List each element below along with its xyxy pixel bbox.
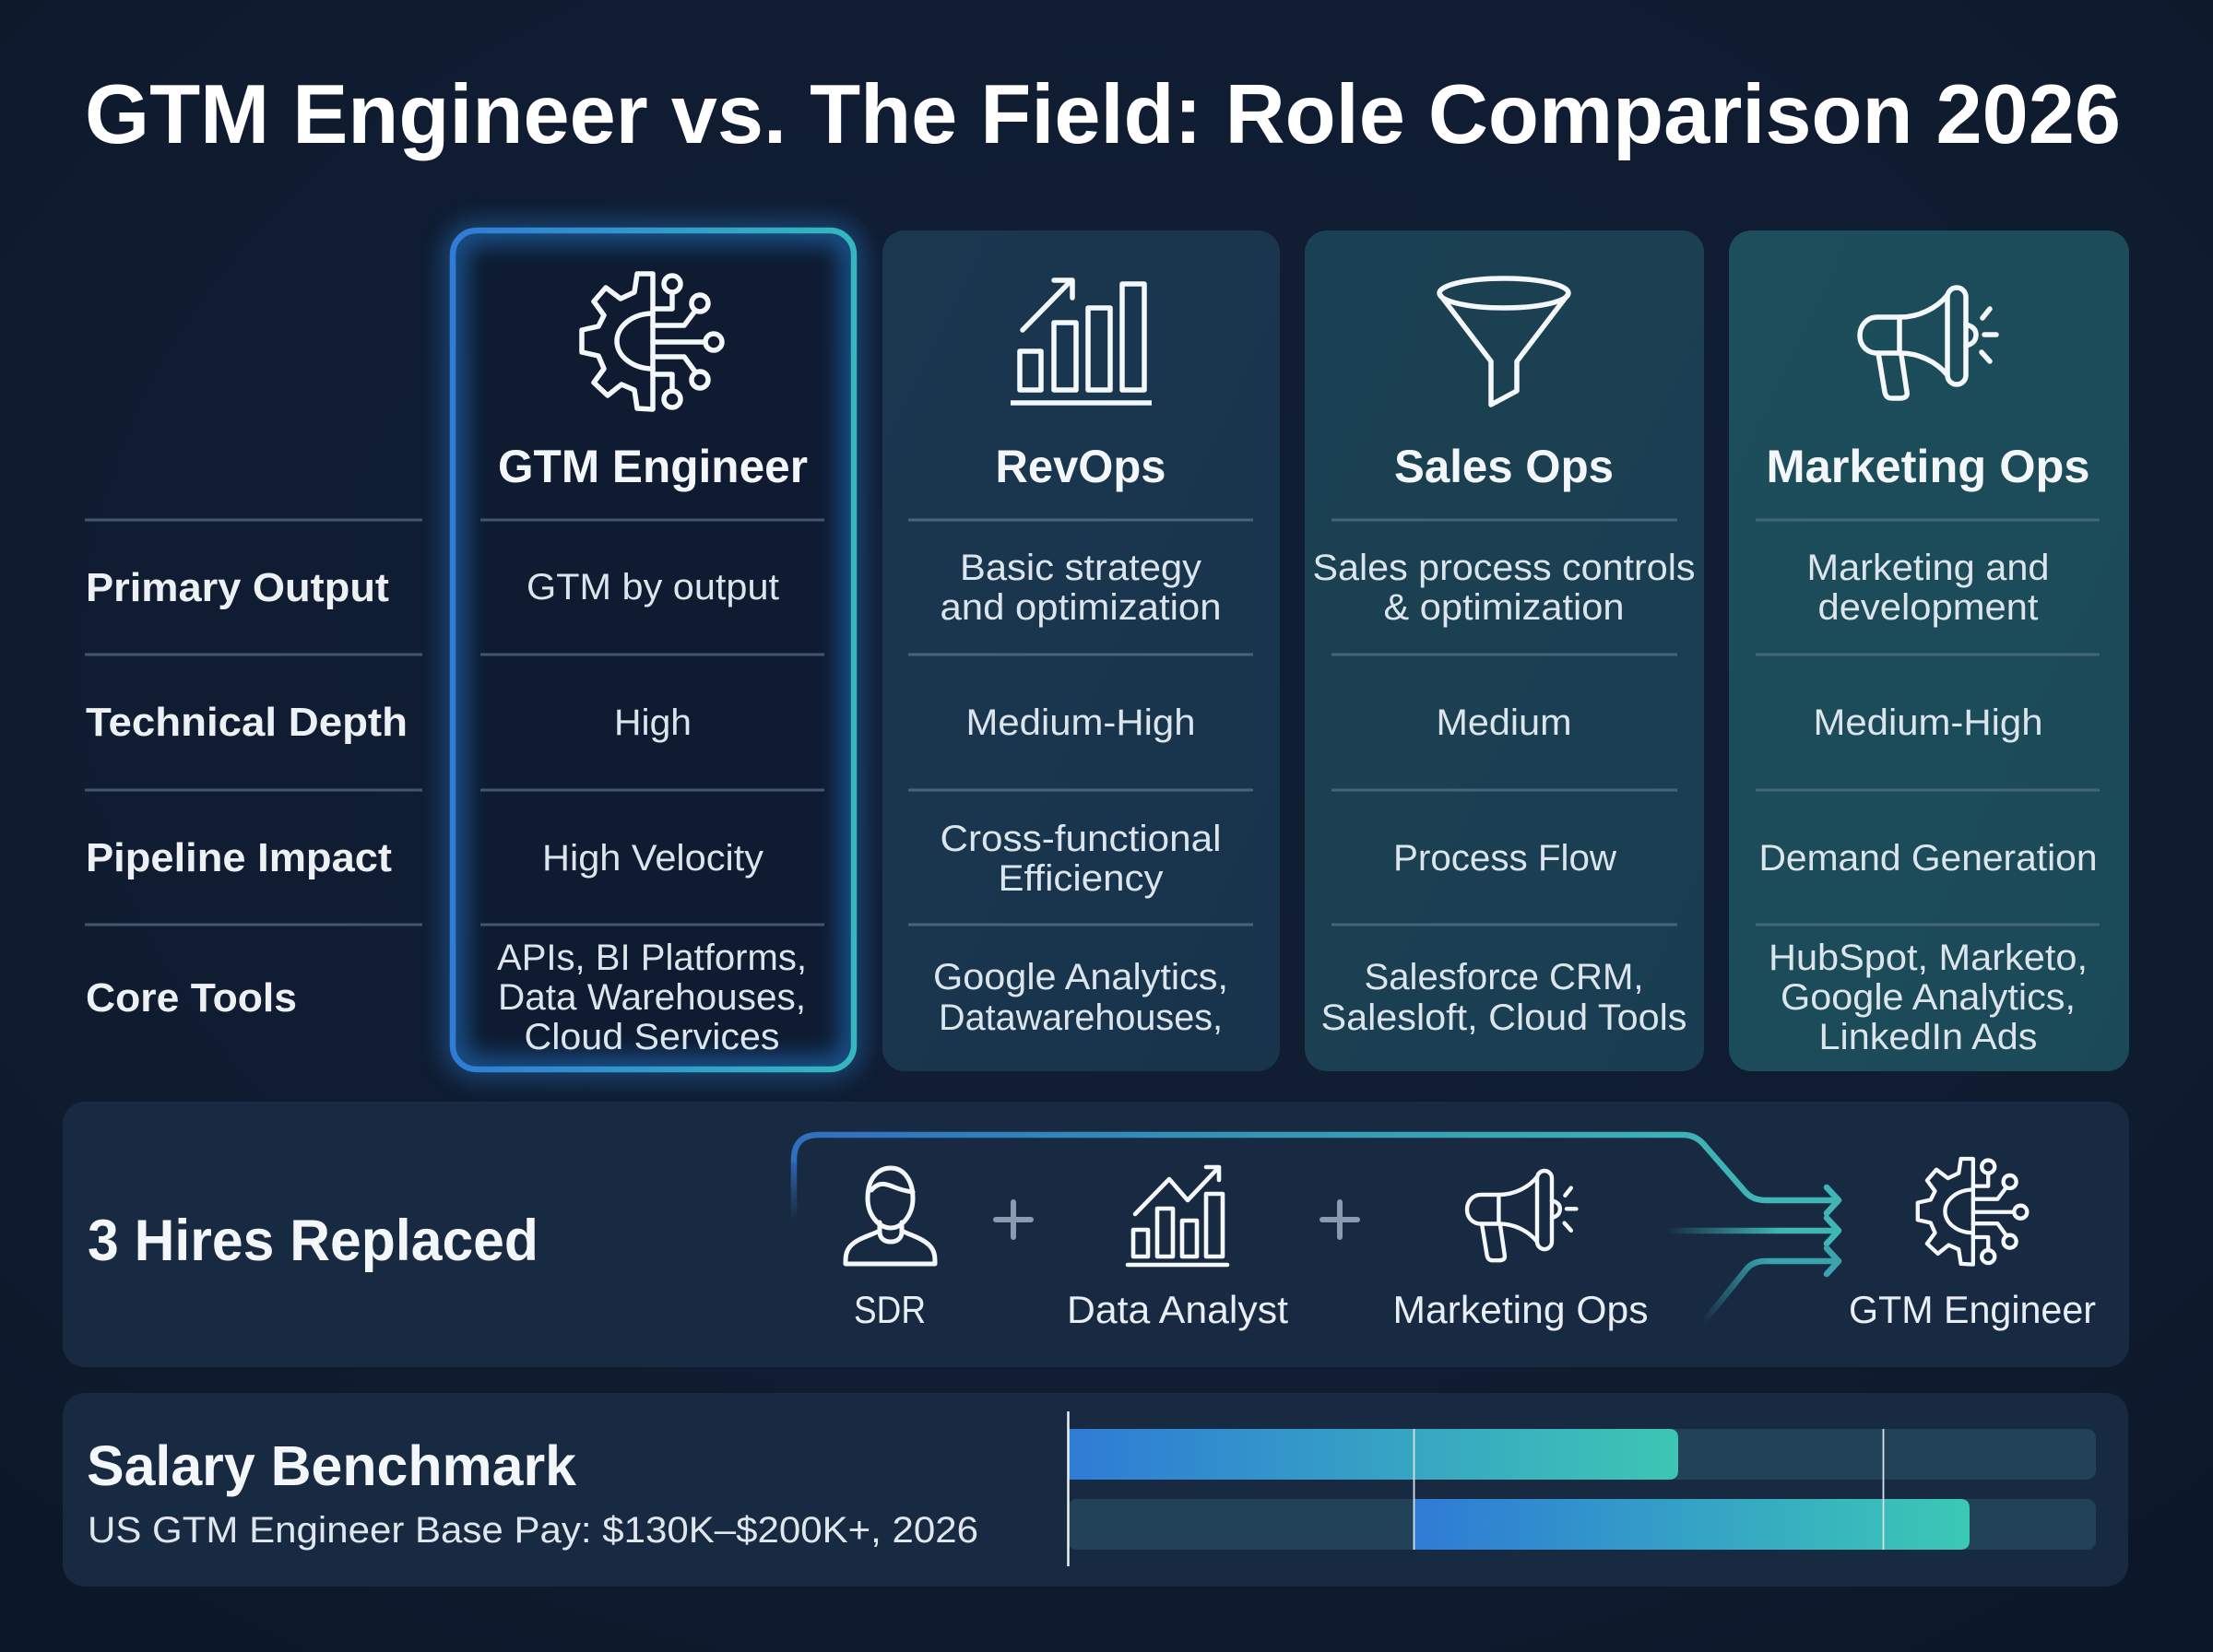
cell: core tools: Salesforce CRM, — [1365, 957, 1643, 997]
label: Technical Depth: Technical Depth — [86, 700, 408, 745]
icon: funnel — [1439, 278, 1568, 405]
cell: primary output — [1807, 548, 2049, 628]
panel: Salary Benchmark — [63, 1393, 2128, 1587]
cell: primary output — [1313, 548, 1695, 628]
panel: GTM Engineer column (highlighted) — [453, 230, 854, 1069]
cell: pipeline impact: High Velocity — [542, 838, 763, 879]
cell: primary output — [941, 548, 1221, 628]
label: Marketing Ops: Marketing Ops — [1392, 1288, 1649, 1331]
icon: gear with circuit — [582, 274, 722, 409]
panel: RevOps column — [882, 230, 1280, 1071]
label: Core Tools: Core Tools — [86, 975, 297, 1021]
icon: bar chart with arrow — [1011, 280, 1152, 403]
cell: core tools: HubSpot, Marketo, — [1769, 938, 2088, 978]
cell: pipeline impact: Efficiency — [998, 858, 1164, 899]
cell: core tools: Datawarehouses, — [939, 997, 1223, 1038]
operator: plus — [996, 1202, 1031, 1237]
cell: core tools: APIs, BI Platforms, — [497, 938, 807, 978]
panel: Marketing Ops column — [1729, 230, 2129, 1071]
cell: core tools: Data Warehouses, — [498, 977, 806, 1018]
cell: core tools: Google Analytics, — [933, 957, 1228, 997]
bar: bottom range — [1414, 1499, 1970, 1550]
label: GTM Engineer: GTM Engineer — [1849, 1288, 2096, 1331]
cell: primary output: GTM by output — [527, 567, 779, 608]
label: SDR: SDR — [854, 1288, 926, 1331]
cell: primary output: development — [1818, 587, 2038, 628]
icon: megaphone — [1467, 1171, 1576, 1260]
heading: Marketing Ops: Marketing Ops — [1767, 441, 2089, 492]
title: GTM Engineer vs. The Field: Role Comparison 2026 — [85, 68, 2121, 161]
cell: core tools: Google Analytics, — [1781, 977, 2076, 1018]
heading: 3 Hires Replaced: 3 Hires Replaced — [88, 1209, 538, 1273]
cell: core tools: Cloud Services — [524, 1017, 780, 1057]
arrow: bottom — [1703, 1248, 1839, 1323]
cell: primary output: & optimization — [1383, 587, 1625, 628]
label: Pipeline Impact: Pipeline Impact — [86, 835, 392, 880]
cell: primary output: Marketing and — [1807, 548, 2049, 588]
bar: top range — [1068, 1429, 1678, 1480]
operator: plus — [1322, 1202, 1357, 1237]
cell: primary output: Basic strategy — [960, 548, 1201, 588]
cell: pipeline impact: Process Flow — [1393, 838, 1616, 879]
panel: Sales Ops column — [1305, 230, 1704, 1071]
cell: primary output: and optimization — [941, 587, 1221, 628]
cell: pipeline impact: Cross-functional — [941, 819, 1221, 859]
cell: core tools: LinkedIn Ads — [1818, 1017, 2038, 1057]
cell: core tools — [1320, 957, 1687, 1038]
icon: data analyst chart — [1128, 1167, 1227, 1265]
panel: 3 Hires Replaced — [63, 1102, 2129, 1367]
icon: megaphone — [1860, 288, 1996, 398]
icon: gear with circuit — [1918, 1159, 2027, 1265]
cell: core tools — [1769, 938, 2088, 1057]
heading: RevOps: RevOps — [996, 441, 1166, 492]
heading: Sales Ops: Sales Ops — [1394, 441, 1614, 492]
heading: GTM Engineer: GTM Engineer — [498, 441, 808, 492]
subheading: base pay: US GTM Engineer Base Pay: $130K–$200K+, 2026 — [88, 1510, 978, 1551]
label: Primary Output: Primary Output — [86, 565, 389, 610]
arrow: merging path top — [794, 1135, 1839, 1220]
cell: pipeline impact: Demand Generation — [1759, 838, 2097, 879]
icon: person (SDR) — [846, 1168, 935, 1264]
cell: primary output: Sales process controls — [1313, 548, 1695, 588]
cell: technical depth: Medium — [1437, 702, 1571, 743]
cell: core tools — [933, 957, 1228, 1038]
row labels column — [85, 520, 422, 1021]
cell: technical depth: Medium-High — [966, 702, 1195, 743]
label: Data Analyst: Data Analyst — [1067, 1288, 1288, 1331]
heading: Salary Benchmark: Salary Benchmark — [87, 1434, 576, 1497]
cell: pipeline impact — [941, 819, 1221, 899]
cell: technical depth: High — [614, 702, 692, 743]
chart: salary range bars — [1068, 1411, 2096, 1566]
cell: technical depth: Medium-High — [1813, 702, 2043, 743]
cell: core tools — [497, 938, 807, 1057]
cell: core tools: Salesloft, Cloud Tools — [1320, 997, 1687, 1038]
arrow: middle — [1665, 1218, 1839, 1244]
